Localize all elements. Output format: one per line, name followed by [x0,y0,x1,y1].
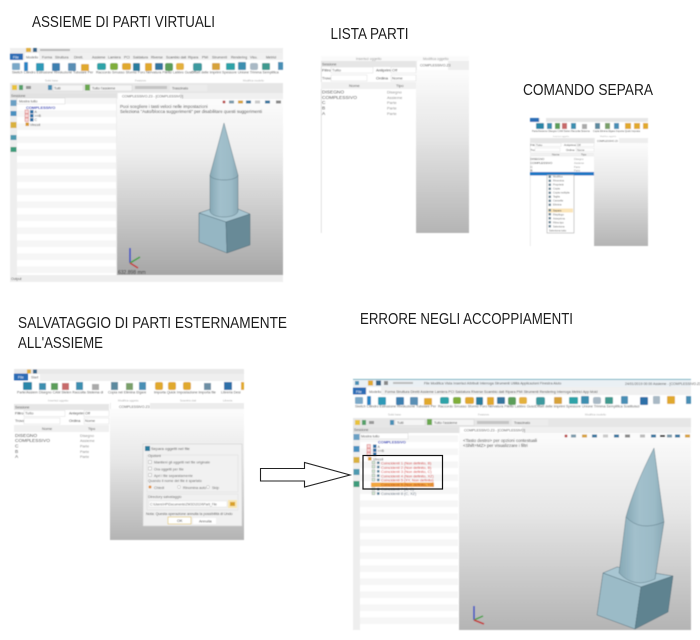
ribbon: Libreria [223,398,233,402]
parts list: Assieme [387,95,403,100]
coordinate axes [130,248,140,268]
menu tabs: Lamiera [108,56,121,60]
title: salvataggio di parti esternamente all'assieme [18,315,287,352]
parts list: Parte [574,168,581,172]
ribbon: Features [478,412,490,416]
parts list: Filtro [15,412,23,416]
model tree: Vincoli [373,457,383,461]
model tree: Mostra tutto [361,434,380,438]
toolbar: Tutti [397,421,404,425]
parts list: Antiprima [564,143,576,147]
3d viewport: COMPLESSIVO.Z3 - [COMPLESSIVO] [464,428,525,432]
3d viewport [459,427,691,630]
ribbon: Libreria Desi [221,390,241,394]
dialog: separa oggetti nel file: Ora oggetti per file [154,468,184,472]
ribbon: Parte/Assiem Disegno CAM Stelen Raccolta Sistema di [17,390,103,394]
context menu: Modifica [553,174,563,178]
constraint errors: Coincidenti 2 (Non definito, B) [381,466,432,470]
coordinate axes [474,606,484,624]
menu tabs: Forma [42,56,52,60]
arrow [260,462,350,487]
context menu: Filtra tipo [553,220,564,224]
constraint errors: Coincidenti 5 (XY, Non definito) [381,479,434,483]
parts list: Off [85,412,91,416]
menu tabs [10,53,283,60]
parts list: B [530,168,533,172]
3d viewport: <Shift+MZ> per visualizzare i filtri [463,443,528,448]
parts list: Filtro [322,68,332,72]
parts list: DISEGNO [15,433,37,439]
constraint errors: Coincidenti 4 (Non definito, XZ) [381,474,434,478]
menu tabs: Visu. [250,56,258,60]
panel: screenshot salvataggio parti [14,369,244,540]
context menu: Separa [553,208,562,212]
viewport gradient [594,143,648,246]
side strip [353,433,360,630]
parts list: Ordina [376,76,389,80]
ribbon: Parte/Assieme Disegno CAM Stelen Raccolta Sistema [532,130,590,133]
context menu: Anteprima [553,216,565,220]
menu tabs: Modello [369,390,381,394]
parts list: C [322,100,326,106]
parts list: B [15,449,18,455]
parts list: Disegno [80,434,94,438]
model tree: A [378,445,380,449]
ribbon: Copia Elimina Elgare Importa Quick Imposta [593,130,641,133]
title: salvataggio di parti esternamente all'assieme: ALL'ASSIEME [18,335,103,352]
panel: screenshot assieme di parti virtuali [10,48,283,282]
dialog: separa oggetti nel file: OK [177,519,183,523]
dialog: separa oggetti nel file: Chiedi [154,486,164,490]
parts list: Disegno [387,90,402,94]
parts list [530,143,594,246]
ribbon: Raccordo Smusso Sformo Foro Nervatura Filetto Labbro Gusci [438,404,536,408]
parts list: B [322,106,325,112]
constraint errors: Coincidenti 6 (Non definito, YZ) [381,483,434,487]
ribbon: Modifica modello [585,412,606,416]
menu tabs: Saldatura [133,56,148,60]
dialog: separa oggetti nel file: Nota: Questa operazione annulla la possibilità di Undo [146,512,233,516]
viewport [110,403,244,540]
title: salvataggio di parti esternamente all'assieme: SALVATAGGIO DI PARTI ESTERNAMENTE [18,315,287,332]
panel: screenshot comando separa: COMPLESSIVO.Z3 [597,140,619,143]
ribbon icons: Features [135,78,147,82]
menu tabs: Dirett. [74,56,83,60]
dialog: separa oggetti nel file: Quando il nome del file è spartato [148,479,202,483]
side strip: Sessione [11,94,25,98]
toolbar [353,418,691,427]
parts list: Nome [577,148,585,152]
3d viewport: <Tasto destro> per opzioni contestuali [463,438,537,443]
context menu: Copia multipla [553,190,570,194]
parts list: Anteprima [69,412,87,416]
parts list: Parte [80,444,89,448]
3d viewport: Puoi scegliere i tasti veloci nelle impostazioni [120,104,208,109]
parts list: Trova [322,76,333,80]
viewport: COMPLESSIVO.Z3 [119,405,150,409]
ribbon: Scambio dati [180,398,197,402]
ribbon: Modifica oggetto [118,398,139,402]
model tree: C [34,118,38,122]
constraint errors [371,461,434,496]
panel: screenshot lista parti [321,56,469,233]
ribbon [353,395,691,418]
context menu: Copia [553,186,560,190]
3d viewport: COMPLESSIVO.Z3 - [COMPLESSIVO] [122,94,183,98]
panel: screenshot salvataggio parti: Start [31,376,38,380]
parts list: Nome [42,427,52,431]
parts list: COMPLESSIVO [15,438,50,444]
parts list: Nome [392,76,403,80]
menu tabs: File [356,390,362,394]
panel: screenshot errore negli accoppiamenti: Sessione [354,428,368,432]
parts list [14,404,109,460]
panel: screenshot comando separa [530,118,648,246]
parts list: Tipo [581,152,587,156]
menu tabs: Riverse [151,56,163,60]
panel: screenshot errore negli accoppiamenti [353,379,700,630]
dialog: separa oggetti nel file: C:\Users\HP\Documents\ZW3D\2024\Parti_File [150,502,217,506]
toolbar: Tutto l'assieme [92,86,115,90]
parts list: COMPLESSIVO [322,95,357,101]
parts list: Off [392,68,398,72]
constraint errors: Coincidenti 7 (A, C) [381,488,415,492]
toolbar [10,83,283,93]
menu tabs: PCI [124,56,130,60]
dialog: separa oggetti nel file: Separa oggetti nel file [151,446,190,451]
context menu: Rinomina [553,178,565,182]
ribbon icons: Solid base [45,78,59,82]
panel: screenshot lista parti: Sessione [322,62,336,66]
context menu: Seleziona [553,224,565,228]
parts list: Assieme [574,161,585,165]
constraint errors: Coincidenti 8 (C, XZ) [381,492,417,496]
3d viewport: Seleziona "Auto/blocca suggerimenti" per disabilitare questi suggerimenti [120,109,262,114]
ribbon icons: Sketch Cilindro Estrusione Rivoluzione Tubolare Per [12,70,94,74]
dialog: separa oggetti nel file: Directory salvataggio [148,495,182,499]
parts list: Parte [80,450,89,454]
menu tabs: Struttura [55,56,68,60]
menu tabs: Metrici [266,56,277,60]
3d model: cone on cylinder on box [597,448,673,629]
dialog: separa oggetti nel file: Opzioni [148,454,161,458]
parts list: Tutto [536,143,543,147]
toolbar: Trascinato [172,86,188,90]
parts list: Parte [387,111,397,116]
menu tabs: Strumenti [212,56,227,60]
parts list: Tipo [88,427,95,431]
model tree: >>B [378,449,385,453]
constraint errors: Coincidenti 1 (Non definito, B) [381,462,432,466]
context menu: Elimina [553,202,562,206]
status bar: Output [11,277,22,281]
parts list: Ordina [566,148,575,152]
parts list: Filtro [530,143,537,147]
context menu: Seleziona tutto [549,228,567,232]
parts list: A [322,111,326,117]
toolbar: Trascinato [514,421,530,425]
panel: screenshot salvataggio parti: File [18,376,24,380]
toolbar: Tutto l'assieme [434,421,457,425]
3d viewport [117,93,283,276]
ribbon: Modifica oggetto [600,135,617,138]
parts list: Nome [349,83,360,88]
menu tabs [353,387,691,395]
context menu: Riepilogo [553,212,564,216]
ribbon: Offset delle Imprimi Spessore Unione Trimma Semplifica Sostituisci [535,404,640,408]
parts list: Nome [85,419,95,423]
ribbon: Sketch Cilindro Estrusione Rivoluzione Tubolare Per [355,404,437,408]
model tree: COMPLESSIVO [26,105,55,110]
scale label: 632.898 mm [118,270,146,276]
model tree: COMPLESSIVO [378,440,406,444]
menu tabs: PMI [202,56,208,60]
viewport gradient [416,70,469,233]
dialog: separa oggetti nel file: Rinomina auto [183,486,206,490]
ribbon: Inserisci oggetto [48,398,69,402]
panel: screenshot lista parti: Inserisci oggetto [356,57,382,61]
ribbon icons: Offset delle Imprimi Spessore Unione Trimma Semplifica [191,70,279,74]
parts list [321,67,416,233]
parts list: Parte [387,106,397,110]
context menu: Proprietà [553,182,564,186]
ribbon: Inserisci oggetto [553,135,570,138]
parts list: A [15,454,19,460]
panel: screenshot lista parti: COMPLESSIVO.Z3 [420,64,451,68]
title bar [355,380,700,386]
title: errore negli accoppiamenti: ERRORE NEGLI ACCOPPIAMENTI [360,311,573,328]
context menu: Cancella [553,198,564,202]
parts list: Tipo [396,83,404,88]
parts list: Trova [530,148,538,152]
parts list: Tutto [332,68,342,72]
parts list: Off [577,143,581,147]
parts list: Sessione [15,406,29,410]
parts list: Parte [387,100,397,105]
parts list: COMPLESSIVO [530,161,553,165]
dialog: separa oggetti nel file: Annulla [199,520,213,524]
menu tabs: Modello [26,56,38,60]
title: lista parti: LISTA PARTI [330,26,408,43]
ribbon: Solid base [388,412,402,416]
parts list: Tutto [25,412,34,416]
dialog: separa oggetti nel file: Apri i file separatamente [154,474,193,478]
model tree [360,433,458,630]
context menu [547,174,574,233]
parts list: Ordina [69,419,81,423]
menu tabs: Rendering [231,56,247,60]
title: comando separa: COMANDO SEPARA [523,82,654,99]
title bar: 24/01/2019 00:00 Assieme - [COMPLESSIVO.Z3] [625,382,700,386]
parts list: Assieme [80,439,95,443]
title bar: File Modifica Vista Inserisci Attributi Interroga Strumenti Utilità Applicazioni Finestra Aiuto [424,382,561,386]
callout: black rectangle around constraint errors [363,456,442,489]
model tree: Vincoli [30,123,40,127]
ribbon icons: Modifica modello [243,78,264,82]
model tree: >>B [34,114,42,118]
context menu: Taglia [553,194,560,198]
model tree [17,98,116,275]
menu tabs: Assieme [92,56,105,60]
parts list: Antiprima [376,68,394,72]
3d model: cone on cylinder on box [199,123,250,253]
dialog: separa oggetti nel file: Skip [212,486,219,490]
menu tabs: Forma Struttura Diretti Assieme Lamiera PCI Saldatura Riverse Scambio dati Ripara PMI Strumenti Rendering Interroga Metrici App Mold [385,390,598,394]
ribbon: Importa Quick Impostazione Importa file [154,390,216,394]
title: assieme di parti virtuali: ASSIEME DI PARTI VIRTUALI [32,14,215,31]
panel: screenshot lista parti: Modifica oggetto [423,57,449,61]
model tree: Mostra tutto [19,100,38,104]
parts list: C [15,444,19,450]
ribbon icons: Raccordo Smusso Sformo Foro Nervatura Filetto Labbro Gusci [96,70,194,74]
toolbar: Tutti [54,86,61,90]
ribbon [14,381,244,403]
ribbon: Copia nel Elimina Elgare [108,390,146,394]
dialog: separa oggetti nel file: Mantieni gli oggetti nel file originale [154,460,210,464]
parts list: Nome [552,152,560,156]
side strip [10,93,117,275]
parts list: DISEGNO [530,157,545,161]
menu tabs: Scambio dati [166,56,186,60]
parts list: Disegno [574,157,584,161]
selected row [530,172,594,176]
model tree: A [34,110,38,114]
ribbon [530,122,648,138]
parts list: C [530,165,534,169]
ribbon icons [10,60,283,83]
parts list: Parte [80,455,89,459]
parts list: Parte [574,165,581,169]
constraint errors: Coincidenti 3 (Non definito, C) [381,470,432,474]
parts list: Trova [15,419,25,423]
menu tabs: Ripara [188,56,198,60]
parts list: DISEGNO [322,90,344,96]
dialog: separa oggetti nel file [143,444,242,526]
menu tabs: File [13,56,19,60]
